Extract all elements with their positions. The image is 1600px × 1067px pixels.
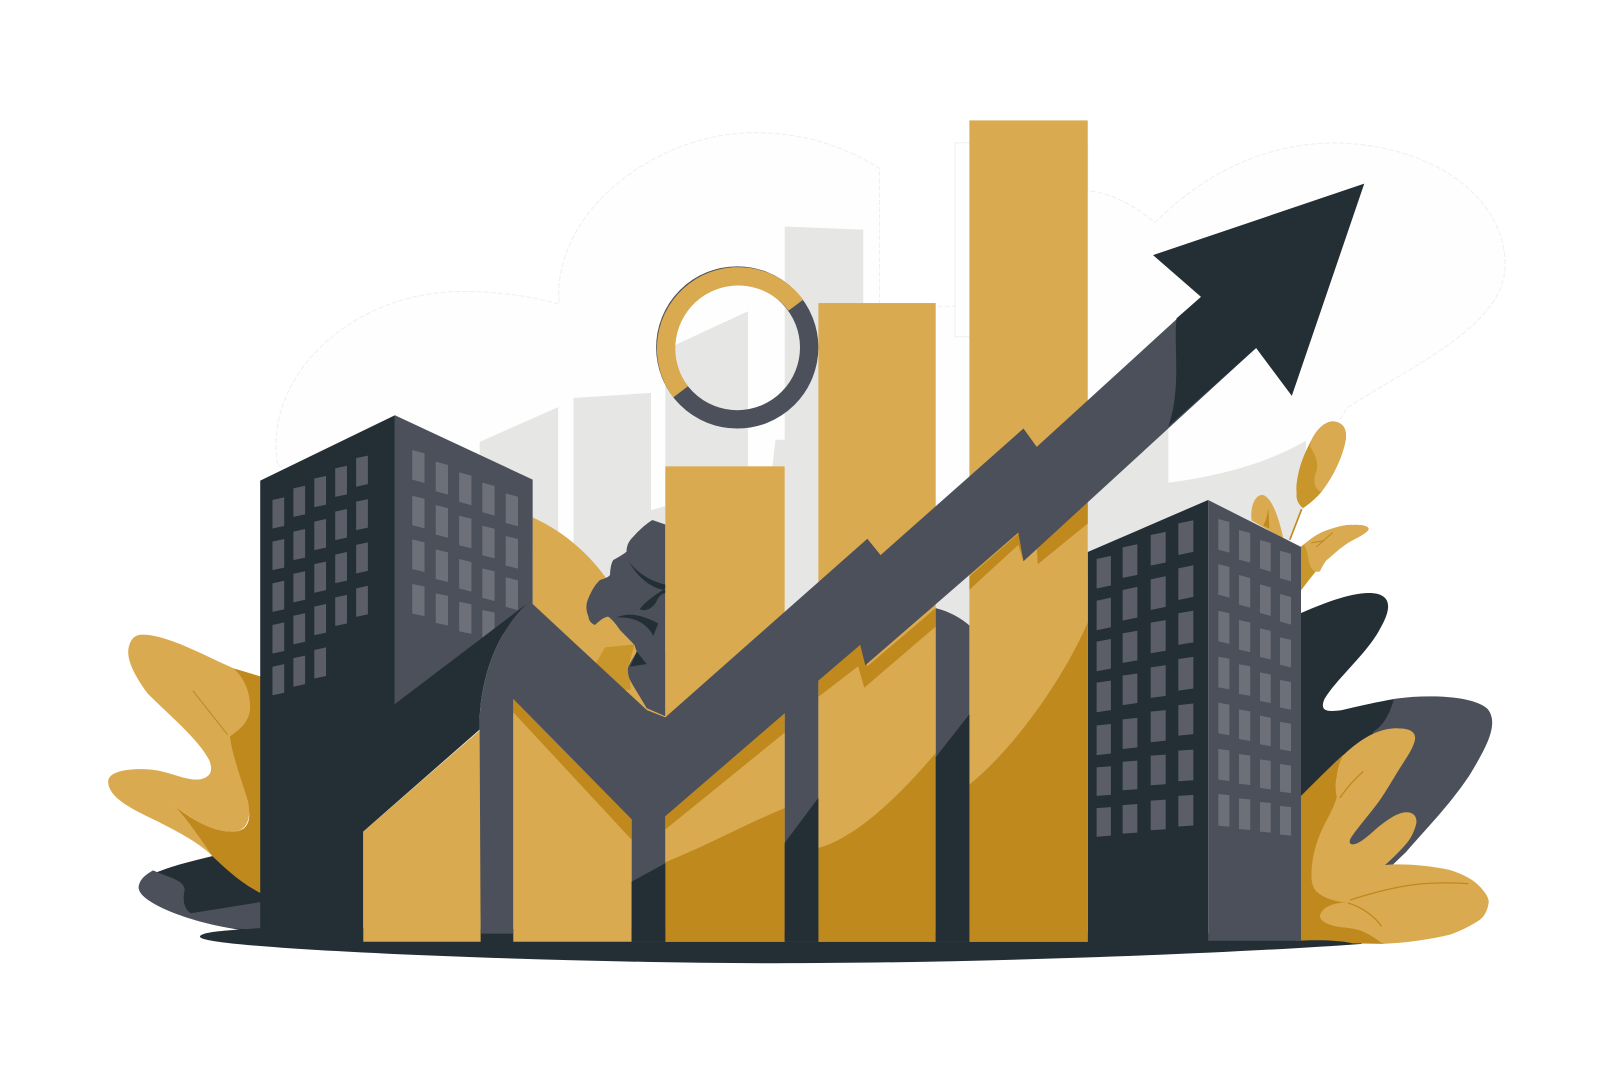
leaf: dark bbox=[1296, 593, 1394, 806]
column dome between bars 4 and 5 bbox=[936, 608, 969, 942]
gold hill behind head bbox=[533, 517, 665, 727]
bar 3 bbox=[665, 466, 785, 942]
building dark face and shadow bbox=[260, 415, 527, 942]
leaf: lower lobe bbox=[1320, 903, 1384, 944]
bar 5 bbox=[969, 120, 1088, 942]
leaf: light gold bbox=[1311, 728, 1489, 944]
bar 1 bbox=[363, 730, 481, 942]
arrow body bbox=[480, 297, 1256, 942]
windows right face bbox=[412, 450, 518, 642]
arrow head bbox=[1153, 184, 1364, 427]
leaf: slate bbox=[1347, 696, 1492, 872]
background cloud bbox=[276, 133, 1505, 571]
windows left face bbox=[272, 456, 368, 695]
background grey buildings bbox=[480, 227, 1306, 653]
right building bbox=[1088, 500, 1301, 942]
magnifying ring bbox=[665, 275, 809, 419]
bar 4 bbox=[818, 303, 936, 942]
windows left face bbox=[1097, 520, 1193, 837]
left ground blob bbox=[139, 856, 267, 931]
leaf stem bbox=[1290, 509, 1302, 540]
leaf: upper oval bbox=[1296, 421, 1346, 508]
right plant bbox=[1251, 421, 1492, 944]
leaf veins bbox=[1340, 771, 1468, 926]
leaf: small round bbox=[1251, 495, 1283, 539]
ground shadow bbox=[200, 928, 1362, 963]
person head behind bar bbox=[586, 520, 665, 718]
left building bbox=[260, 415, 533, 942]
bar 2 bbox=[513, 699, 632, 942]
leaf: dark gold base bbox=[1296, 755, 1384, 944]
windows right face bbox=[1218, 519, 1291, 836]
column shadows bbox=[632, 714, 969, 942]
building right face bbox=[395, 415, 533, 714]
leaf: side bbox=[1296, 525, 1369, 597]
left plant leaves bbox=[108, 635, 267, 898]
